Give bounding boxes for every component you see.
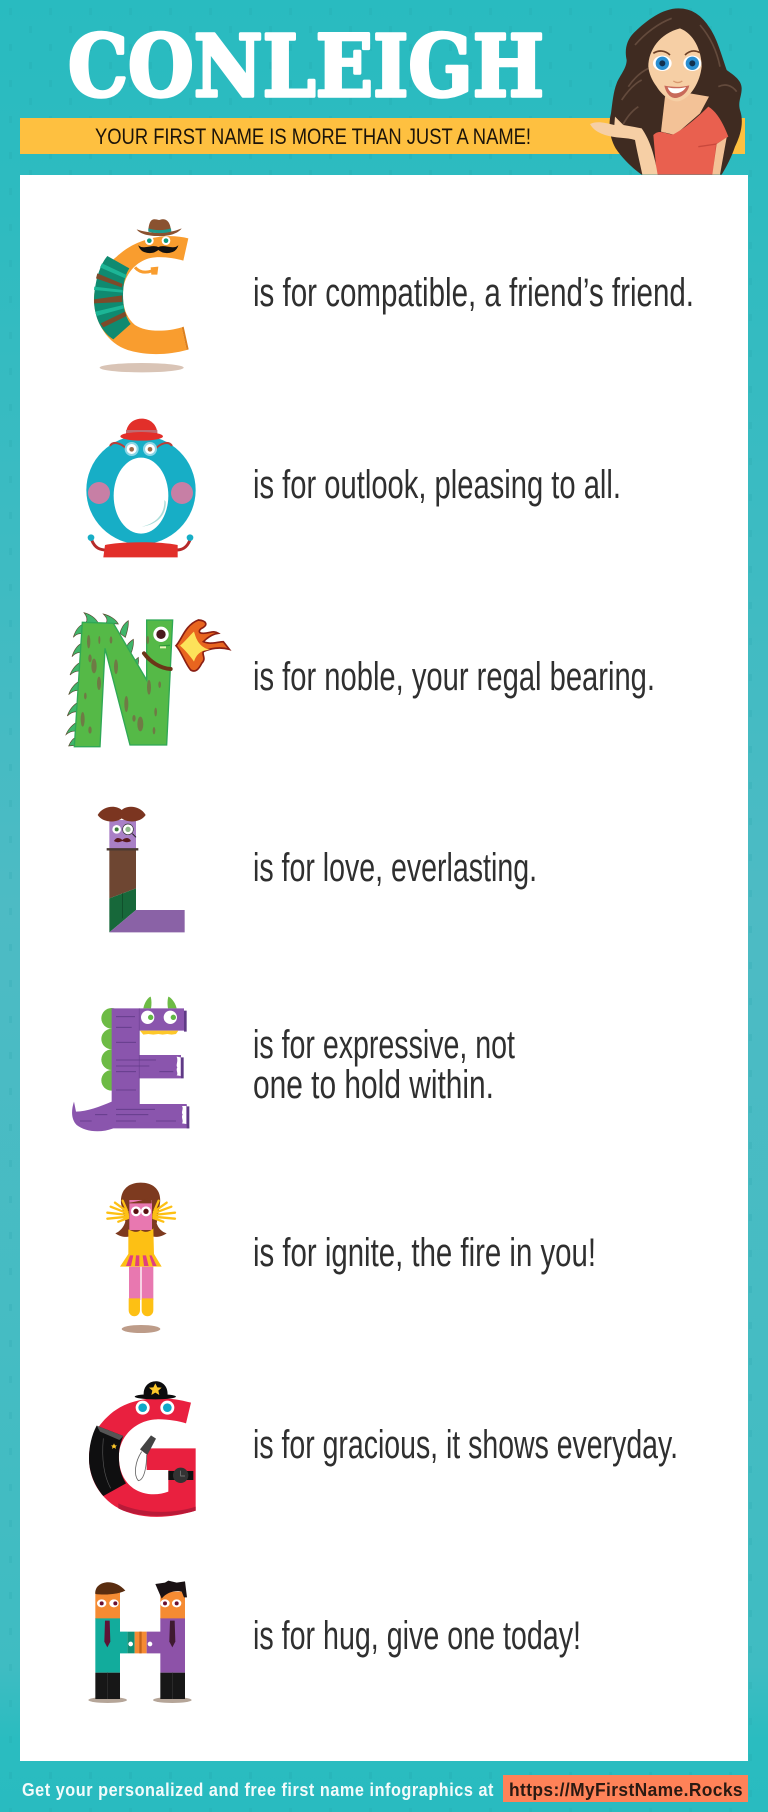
illustration: woman presenter <box>590 8 742 175</box>
letter C character <box>94 219 189 372</box>
tagline band: YOUR FIRST NAME IS MORE THAN JUST A NAME! <box>95 124 531 149</box>
footer url badge: https://MyFirstName.Rocks <box>509 1780 743 1800</box>
tagline band <box>20 118 745 154</box>
row 2 text: is for outlook, pleasing to all. <box>253 463 621 507</box>
letter E monster character <box>72 997 189 1131</box>
row 5 text: one to hold within. <box>253 1063 494 1107</box>
row 4 text: is for love, everlasting. <box>253 846 537 890</box>
row 8 text: is for hug, give one today! <box>253 1614 581 1658</box>
row 5 text <box>253 1023 515 1107</box>
letter N dragon character <box>66 613 229 747</box>
footer call to action text: Get your personalized and free first name infographics at <box>22 1780 494 1800</box>
letter G police character <box>89 1381 196 1517</box>
letter I cheerleader character <box>107 1183 175 1333</box>
letter H handshake character <box>88 1581 192 1703</box>
title: CONLEIGH <box>68 17 544 117</box>
row 6 text: is for ignite, the fire in you! <box>253 1231 596 1275</box>
letter O character <box>86 419 196 557</box>
letter L character <box>98 807 185 932</box>
row 5 text: is for expressive, not <box>253 1023 515 1067</box>
